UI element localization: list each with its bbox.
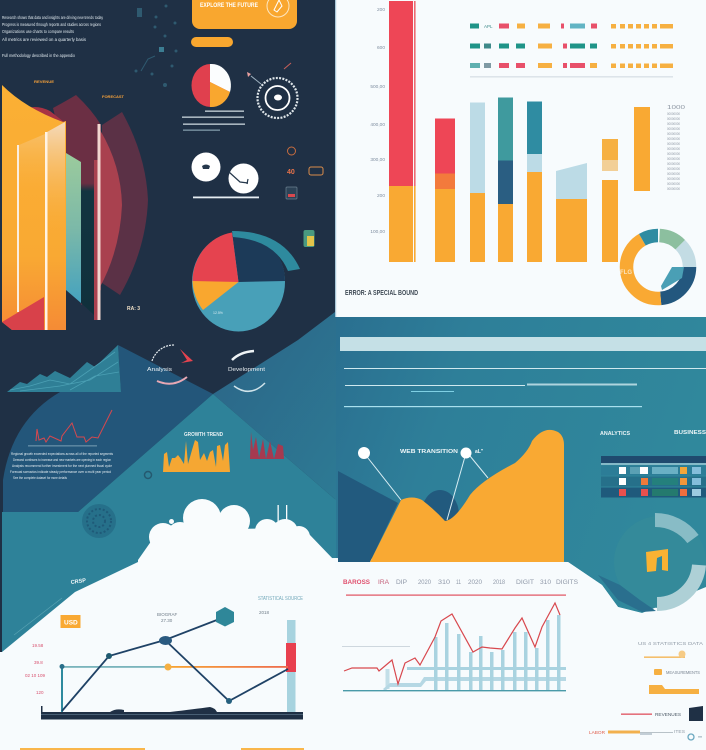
- orange main panel: [2, 85, 66, 330]
- donut chart: [620, 236, 690, 298]
- textured circle: [82, 504, 116, 538]
- chart annotations: [157, 596, 303, 623]
- side data column: 00000000: [667, 172, 680, 176]
- line chart top rule: [346, 594, 566, 596]
- intro text block: Progress is measured through reports and studies across regions: [2, 22, 102, 27]
- orange area chart: aL": [475, 449, 484, 455]
- bottom-right legend text: [589, 641, 704, 736]
- intro text block: Full methodology described in the appendix: [2, 53, 76, 58]
- teal header bar: [340, 337, 706, 351]
- mid text block: Forecast scenarios indicate steady performance over a multi year period: [10, 470, 111, 474]
- line chart header labels: 310: [540, 579, 552, 586]
- cycle diagram: right: Development: [228, 367, 266, 373]
- red arc band: [100, 130, 122, 287]
- faint network dots: [134, 4, 178, 87]
- pink axis labels: 19.58: [32, 643, 44, 648]
- chart annotations: STATISTICAL SOURCE: [258, 596, 303, 602]
- mid text block: Demand continues to increase and new markets are opening in each region: [13, 458, 111, 462]
- background: dark navy panel: [0, 0, 336, 520]
- side data column: 00000000: [667, 187, 680, 191]
- mountain area chart: [7, 345, 121, 392]
- bottom orange bars: [20, 748, 304, 750]
- line chart header labels: DIGITS: [556, 579, 578, 586]
- icon: two white circles: [192, 152, 259, 198]
- bar 7: [602, 139, 618, 262]
- lower-left line chart: [14, 578, 303, 720]
- chart labels above layered chart: [34, 80, 125, 99]
- line chart header labels: [343, 579, 578, 586]
- side data column: 00000000: [667, 127, 680, 131]
- orange bar chart: [163, 432, 230, 472]
- red strip: [94, 160, 98, 320]
- line chart header labels: 2018: [493, 579, 505, 586]
- background: right teal panel: [335, 317, 706, 627]
- side data column: 00000000: [667, 142, 680, 146]
- side data column: 00000000: [667, 167, 680, 171]
- legend row 3: [470, 63, 673, 68]
- legend row 1: APL: [484, 24, 493, 29]
- chart annotations: 2018: [259, 610, 270, 615]
- y-axis labels: 100,00: [370, 229, 385, 235]
- cycle diagram: right: [228, 351, 266, 391]
- bar 5: [527, 102, 542, 262]
- baseline axis: [41, 706, 303, 720]
- white rules: [17, 145, 19, 312]
- navy trend line: [62, 618, 288, 711]
- bottom-right legend text: LABOR: [589, 730, 606, 736]
- small orange icons: [286, 147, 323, 199]
- bottom-right legend text: REVENUES: [655, 712, 681, 718]
- bottom-right legend text: US 4 STATISTICS DATA: [638, 641, 704, 647]
- teal corner label: CRSP: [70, 578, 87, 586]
- side data column: 00000000: [667, 177, 680, 181]
- side data column: 00000000: [667, 137, 680, 141]
- pie chart: large: [192, 231, 300, 332]
- mid text block: Regional growth exceeded expectations across all of the reported segments: [11, 452, 113, 456]
- small axis label: RA: 3: [127, 306, 140, 312]
- line chart header labels: 310: [438, 579, 451, 586]
- mid text block: Analysts recommend further investment for the next planned fiscal cycle: [12, 464, 112, 468]
- green panel: [66, 153, 81, 303]
- pie chart: small: [192, 64, 231, 107]
- line chart header labels: 2020: [418, 579, 432, 586]
- orange tag: [60, 615, 80, 628]
- pie chart: large: 12.5%: [213, 311, 223, 315]
- side data column: 00000000: [667, 147, 680, 151]
- bottom-right legend text: MEASUREMENTS: [666, 670, 700, 676]
- table labels: [600, 430, 706, 437]
- cycle diagram: left: Analysis: [147, 367, 173, 373]
- side data column: 00000000: [667, 157, 680, 161]
- y-axis labels: 300,00: [370, 157, 385, 163]
- faint teal tick: [14, 598, 62, 635]
- stacked bar chart: [389, 1, 650, 262]
- red bar chart: [250, 432, 284, 459]
- intro text block: Research shows that data and insights are driving new trends today: [2, 15, 104, 20]
- inner maroon arc: [53, 95, 101, 305]
- layered area chart: [2, 85, 148, 330]
- pink axis labels: 39.8: [34, 660, 43, 665]
- line chart header labels: DIP: [396, 579, 407, 586]
- gauge: [598, 516, 706, 612]
- pink axis labels: [25, 643, 46, 695]
- bar 2: [435, 118, 455, 262]
- side data column: 00000000: [667, 182, 680, 186]
- chart labels above layered chart: REVENUE: [34, 80, 55, 84]
- left edge stripe: [0, 512, 2, 652]
- peach highlight right: [47, 122, 65, 240]
- side data column: 00000000: [667, 162, 680, 166]
- white cloud: [138, 499, 336, 570]
- lower-right white area overlay: [337, 562, 706, 750]
- side data column: [667, 105, 685, 191]
- table labels: BUSINESS: [674, 430, 706, 436]
- pink axis labels: 02 10 109: [25, 673, 46, 678]
- intro text block: Organizations use charts to compare results: [2, 29, 75, 34]
- chart annotations: BIOGRAF: [157, 612, 178, 617]
- red line chart: [28, 410, 112, 446]
- icon: target ring: [247, 63, 298, 118]
- mid text block: [10, 452, 113, 480]
- line chart header labels: 2020: [468, 579, 483, 586]
- hexagon marker: [216, 607, 234, 626]
- side data column: 1000: [667, 105, 685, 111]
- bottom-right legend marks: [608, 650, 703, 740]
- dark red wedge: [28, 107, 64, 122]
- line chart header labels: DIGIT: [516, 579, 534, 586]
- bar 3: [470, 102, 485, 262]
- y-axis labels: [370, 7, 385, 235]
- background: upper-right blue wedge: [213, 312, 336, 500]
- side data column: 00000000: [667, 132, 680, 136]
- chart labels above layered chart: FORECAST: [102, 95, 125, 99]
- side data column: 00000000: [667, 117, 680, 121]
- pink axis labels: 120: [36, 690, 44, 695]
- y-axis labels: 200: [377, 193, 385, 199]
- background: lower white region: [0, 558, 706, 750]
- mid text block: See the complete dataset for more details: [13, 476, 67, 480]
- orange bar chart: GROWTH TREND: [184, 432, 223, 438]
- legend row 1: [470, 24, 673, 29]
- side data column: 00000000: [667, 152, 680, 156]
- background: teal region: [2, 394, 336, 655]
- y-axis labels: 500,00: [370, 84, 385, 90]
- line chart header labels: IRA: [378, 579, 390, 586]
- y-axis labels: 400,00: [370, 122, 385, 128]
- gauge lower arc: [657, 565, 699, 604]
- y-axis labels: 200: [377, 7, 385, 13]
- horizontal reference line: [60, 664, 288, 712]
- dark center panel: [81, 160, 94, 315]
- bar 6: [556, 163, 587, 262]
- orange title card: EXPLORE THE FUTURE: [200, 2, 259, 9]
- bar 1: [389, 1, 416, 262]
- legend rows: [470, 24, 673, 77]
- orange area chart: WEB TRANSITION: [400, 449, 458, 455]
- table labels: ANALYTICS: [600, 431, 631, 437]
- bottom-right legend text: ITES: [674, 729, 685, 735]
- intro text block: [2, 15, 104, 58]
- legend row 2: [470, 44, 673, 48]
- orange title card: [192, 0, 297, 29]
- chart annotations: 27.30: [161, 618, 173, 623]
- donut chart: FLG: [620, 270, 632, 276]
- teal text lines: [344, 368, 706, 407]
- intro text block: All metrics are reviewed on a quarterly basis: [2, 37, 87, 42]
- panel caption: ERROR: A SPECIAL BOUND: [345, 290, 418, 297]
- side data column: 00000000: [667, 122, 680, 126]
- orange tag: USD: [64, 620, 78, 626]
- outer maroon arc: [102, 112, 148, 295]
- y-axis labels: 600: [377, 45, 385, 51]
- peach highlight left: [19, 134, 45, 200]
- orange area chart: [338, 430, 564, 562]
- data table: [601, 456, 706, 498]
- bar 8: [634, 107, 650, 191]
- combo bar and line chart: [342, 603, 566, 691]
- red base wedge: [2, 297, 44, 330]
- side data column: 00000000: [667, 112, 680, 116]
- small dark glyph: [144, 472, 152, 478]
- right white panel: [335, 0, 706, 317]
- line chart header labels: BAROSS: [343, 579, 370, 586]
- icon: small legend tag: [304, 230, 314, 247]
- small orange icons: 40: [287, 169, 295, 176]
- line chart header labels: 11: [456, 579, 461, 586]
- vertical range band: [286, 620, 296, 712]
- orange pill button: [191, 37, 233, 47]
- cycle diagram: left: [147, 345, 193, 384]
- background: mid blue region: [3, 345, 213, 512]
- bar 4: [498, 98, 513, 262]
- pie caption lines: [182, 110, 245, 131]
